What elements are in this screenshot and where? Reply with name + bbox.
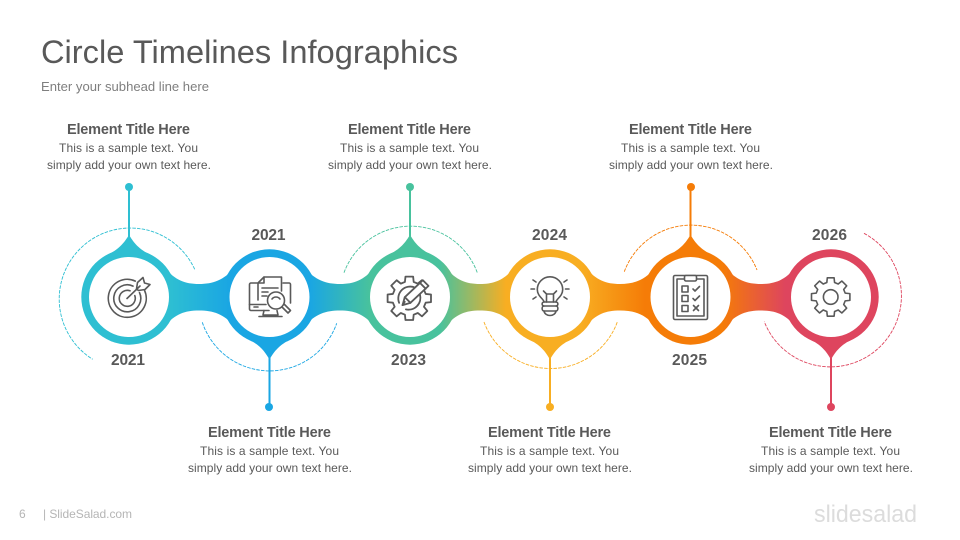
text block 1	[47, 122, 211, 172]
title: Circle Timelines Infographics	[41, 34, 458, 70]
text block 2	[188, 425, 352, 475]
dashed arc 5	[624, 225, 757, 272]
connector 6	[827, 357, 835, 411]
icon: checklist clipboard	[674, 276, 708, 320]
year 6: 2026	[812, 227, 847, 244]
dashed arc 4	[484, 322, 617, 369]
text block 6: simply add your own text here.	[749, 461, 913, 475]
dashed arc 6	[764, 233, 901, 367]
year 4: 2024	[532, 227, 567, 244]
text block 2: This is a sample text. You	[200, 444, 339, 458]
text block 6: Element Title Here	[769, 425, 892, 441]
dashed arc 3	[344, 226, 477, 273]
icon: light bulb	[531, 277, 569, 316]
dashed arc 1	[59, 228, 195, 359]
connector 5	[687, 183, 695, 237]
text block 5: Element Title Here	[629, 122, 752, 138]
white circle centres	[89, 257, 871, 337]
text block 3: Element Title Here	[348, 122, 471, 138]
text block 4: simply add your own text here.	[468, 461, 632, 475]
text block 1: Element Title Here	[67, 122, 190, 138]
text block 4: Element Title Here	[488, 425, 611, 441]
footer page number: 6	[19, 507, 26, 521]
year 3: 2023	[391, 352, 426, 369]
text block 5: simply add your own text here.	[609, 158, 773, 172]
icon: target	[108, 278, 150, 317]
connector 1	[125, 183, 133, 237]
text block 5	[609, 122, 773, 172]
dashed arc 2	[202, 322, 337, 371]
text block 2: Element Title Here	[208, 425, 331, 441]
text block 6	[749, 425, 913, 475]
subhead: Enter your subhead line here	[41, 80, 209, 94]
text block 3: simply add your own text here.	[328, 158, 492, 172]
year 5: 2025	[672, 352, 707, 369]
icon: gear	[812, 278, 850, 316]
text block 3: This is a sample text. You	[340, 141, 479, 155]
connector 4	[546, 357, 554, 411]
text block 3	[328, 122, 492, 172]
text block 4	[468, 425, 632, 475]
text block 1: simply add your own text here.	[47, 158, 211, 172]
connector 2	[265, 357, 273, 411]
text block 2: simply add your own text here.	[188, 461, 352, 475]
text block 6: This is a sample text. You	[761, 444, 900, 458]
footer site name: | SlideSalad.com	[43, 507, 132, 521]
footer logo: slidesalad	[814, 501, 917, 528]
icon: monitor and document search	[250, 277, 290, 316]
text block 5: This is a sample text. You	[621, 141, 760, 155]
text block 4: This is a sample text. You	[480, 444, 619, 458]
timeline band	[81, 235, 879, 360]
text block 1: This is a sample text. You	[59, 141, 198, 155]
year 2: 2021	[252, 227, 286, 244]
connector 3	[406, 183, 414, 237]
year 1: 2021	[111, 352, 145, 369]
icon: gear with pencil	[388, 277, 431, 320]
